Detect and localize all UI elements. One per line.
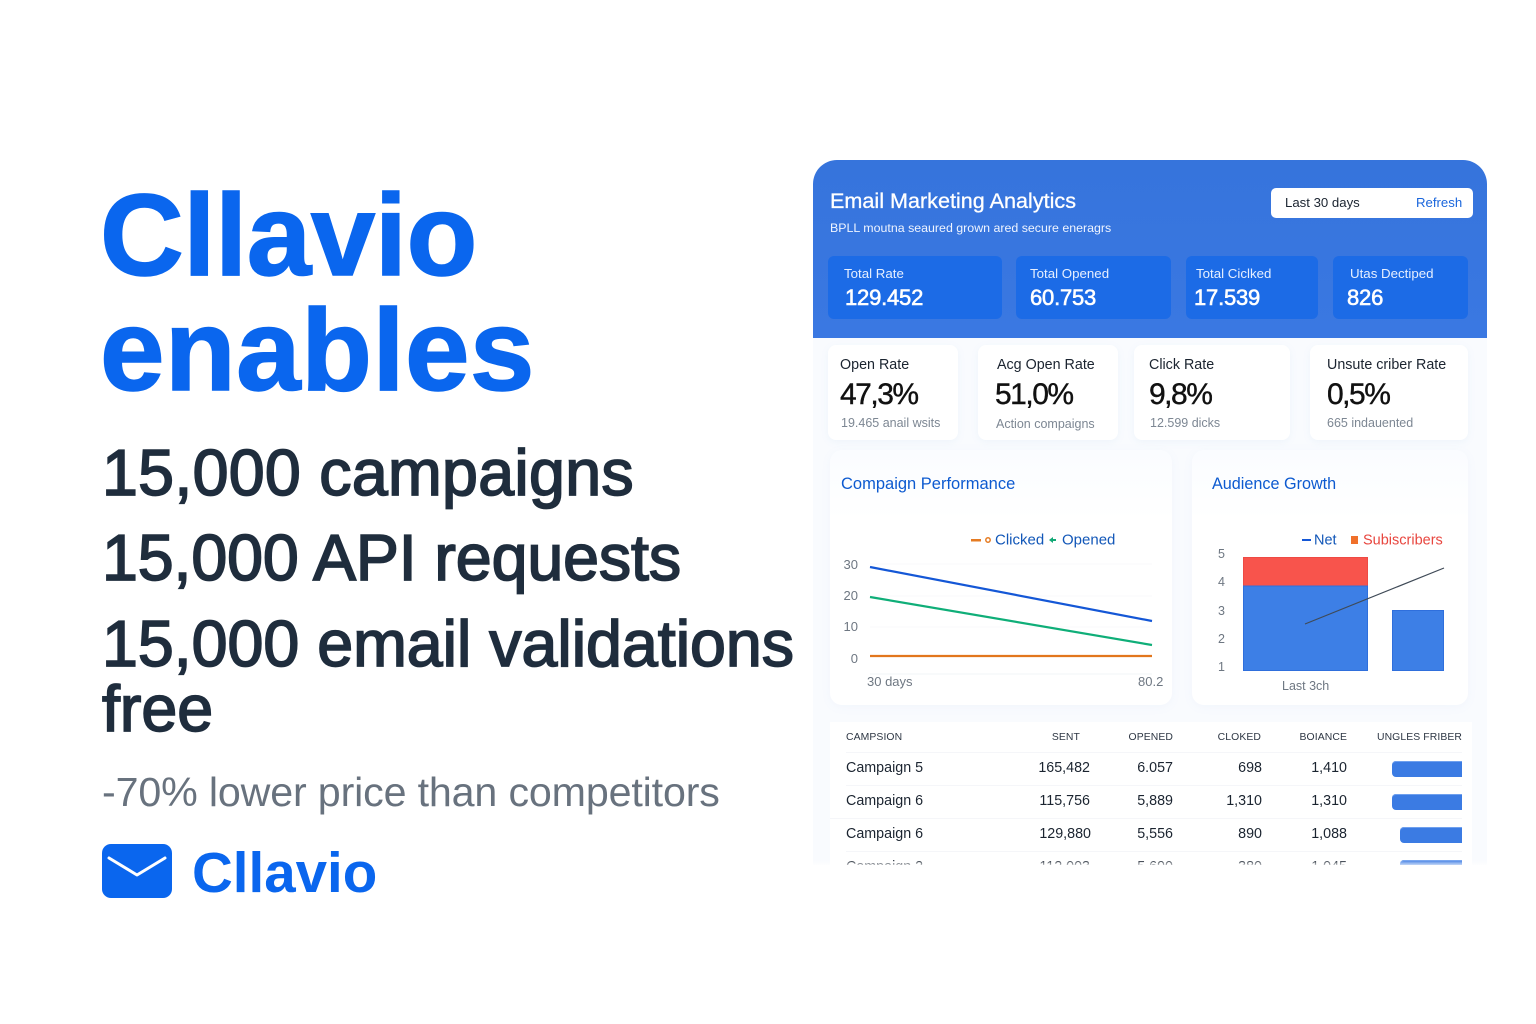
series: blue line xyxy=(870,567,1152,621)
table header xyxy=(846,732,1462,743)
x axis labels xyxy=(867,674,1163,689)
panel: campaign table xyxy=(830,722,1472,865)
table header: SENT xyxy=(1052,732,1080,743)
panel: audience growth xyxy=(1192,450,1468,705)
metric card: open rate xyxy=(828,345,958,440)
legend: Opened xyxy=(1062,532,1115,548)
dashboard inner, page coordinates: Click Rate xyxy=(1149,357,1214,373)
dashboard inner, page coordinates: Total Opened xyxy=(1030,266,1109,281)
legend xyxy=(1302,532,1443,548)
y axis labels: 10 xyxy=(844,619,858,634)
bar chart xyxy=(1218,532,1444,693)
feature list: free xyxy=(102,673,213,745)
feature list: 15,000 API requests xyxy=(102,522,681,594)
dashboard subtitle: BPLL moutna seaured grown ared secure eneragrs xyxy=(830,221,1111,235)
dashboard inner, page coordinates: Utas Dectiped xyxy=(1350,266,1434,281)
table header: CAMPSION xyxy=(846,732,902,743)
dashboard inner, page coordinates: 129.452 xyxy=(845,285,923,310)
table row: campaign 6 second: 1,088 xyxy=(1311,826,1347,842)
date range control xyxy=(1271,188,1473,218)
dashboard inner, page coordinates: Unsute criber Rate xyxy=(1327,357,1446,373)
line chart xyxy=(844,532,1163,689)
table row: campaign 6 xyxy=(846,793,1462,810)
table row: campaign 6 second: 129,880 xyxy=(1039,826,1091,842)
y axis labels: 2 xyxy=(1218,632,1225,646)
table row: campaign 2 clipped xyxy=(846,859,1462,865)
title xyxy=(100,170,535,415)
y axis labels: 4 xyxy=(1218,575,1225,589)
table row: campaign 6 second: 890 xyxy=(1238,826,1262,842)
feature list: 15,000 campaigns xyxy=(102,437,634,509)
stat tile: total clicked xyxy=(1186,256,1318,319)
x axis label: Last 3ch xyxy=(1282,679,1329,693)
dashboard inner, page coordinates: Total Ciclked xyxy=(1196,266,1271,281)
table row: campaign 6: 5,889 xyxy=(1137,793,1173,809)
metric card: click rate xyxy=(1134,345,1290,440)
feature list: 15,000 email validations xyxy=(102,608,794,680)
table row: campaign 5: Campaign 5 xyxy=(846,760,923,776)
dashboard inner, page coordinates: 0,5% xyxy=(1327,378,1389,411)
table row: campaign 5: 6.057 xyxy=(1137,760,1173,776)
table row: campaign 5: 698 xyxy=(1238,760,1262,776)
brand logo xyxy=(102,841,377,904)
y axis labels: 20 xyxy=(844,588,858,603)
date range control: Refresh xyxy=(1416,195,1462,210)
table header: CLOKED xyxy=(1218,732,1261,743)
table row: campaign 6 second: 5,556 xyxy=(1137,826,1173,842)
brand name: Cllavio xyxy=(192,841,377,904)
dashboard inner, page coordinates: Total Rate xyxy=(844,266,904,281)
dashboard inner, page coordinates: Action compaigns xyxy=(996,417,1095,431)
dashboard inner, page coordinates: 17.539 xyxy=(1194,285,1260,310)
dashboard inner, page coordinates: 9,8% xyxy=(1149,378,1211,411)
legend: Clicked xyxy=(995,532,1044,548)
dashboard title: Email Marketing Analytics xyxy=(830,188,1076,213)
price note: -70% lower price than competitors xyxy=(102,769,720,815)
bottom fade xyxy=(813,860,1487,865)
dashboard inner, page coordinates: 51,0% xyxy=(995,378,1073,411)
stat tile: utas decliped xyxy=(1333,256,1468,319)
table row: campaign 6 second: Campaign 6 xyxy=(846,826,923,842)
y axis labels: 0 xyxy=(851,651,858,666)
series: clicked line xyxy=(870,655,1152,657)
table header: BOIANCE xyxy=(1300,732,1347,743)
dashboard inner, page coordinates: 826 xyxy=(1347,285,1383,310)
y axis labels xyxy=(844,557,858,666)
x axis labels: 30 days xyxy=(867,674,913,689)
date range control: Last 30 days xyxy=(1285,195,1360,210)
chart heading: Compaign Performance xyxy=(841,475,1015,493)
panel: campaign performance xyxy=(830,450,1172,705)
dashboard inner, page coordinates: 19.465 anail wsits xyxy=(841,416,940,430)
icon: envelope xyxy=(102,844,172,898)
panel: blue header xyxy=(813,160,1487,338)
feature list xyxy=(102,437,794,745)
bar xyxy=(1392,610,1444,670)
panel: dashboard xyxy=(813,160,1487,865)
trend line xyxy=(1305,568,1444,624)
dashboard inner, page coordinates: 12.599 dicks xyxy=(1150,416,1220,430)
dashboard inner, page coordinates: Acg Open Rate xyxy=(997,357,1095,373)
x axis labels: 80.2 xyxy=(1138,674,1163,689)
chart heading: Audience Growth xyxy=(1212,475,1336,493)
title: Cllavio xyxy=(100,170,477,300)
y axis labels xyxy=(1218,547,1225,674)
table header: OPENED xyxy=(1129,732,1173,743)
title: enables xyxy=(100,285,535,415)
stat tile: total opened xyxy=(1016,256,1171,319)
dashboard inner, page coordinates: 665 indauented xyxy=(1327,416,1413,430)
table row: campaign 6: 115,756 xyxy=(1039,793,1090,809)
dashboard inner, page coordinates: 60.753 xyxy=(1030,285,1096,310)
y axis labels: 3 xyxy=(1218,604,1225,618)
table row: campaign 6: Campaign 6 xyxy=(846,793,923,809)
stat tile: total rate xyxy=(828,256,1002,319)
table row: campaign 5: 165,482 xyxy=(1038,760,1090,776)
table row: campaign 6 second xyxy=(846,826,1462,843)
stacked bar xyxy=(1244,558,1368,670)
y axis labels: 1 xyxy=(1218,660,1225,674)
table row: campaign 6: 1,310 xyxy=(1311,793,1347,809)
legend xyxy=(971,532,1115,548)
metric card: unsubscribe rate xyxy=(1310,345,1468,440)
metric card: avg open rate xyxy=(978,345,1118,440)
legend: Subiscribers xyxy=(1363,532,1443,548)
legend: Net xyxy=(1314,532,1337,548)
dashboard inner, page coordinates: 47,3% xyxy=(840,378,918,411)
y axis labels: 30 xyxy=(844,557,858,572)
y axis labels: 5 xyxy=(1218,547,1225,561)
table header: UNGLES FRIBER xyxy=(1377,732,1462,743)
table row: campaign 6: 1,310 xyxy=(1226,793,1262,809)
table row: campaign 5 xyxy=(846,760,1462,777)
dashboard inner, page coordinates: Open Rate xyxy=(840,357,909,373)
series: opened line xyxy=(870,597,1152,645)
table row: campaign 5: 1,410 xyxy=(1311,760,1347,776)
